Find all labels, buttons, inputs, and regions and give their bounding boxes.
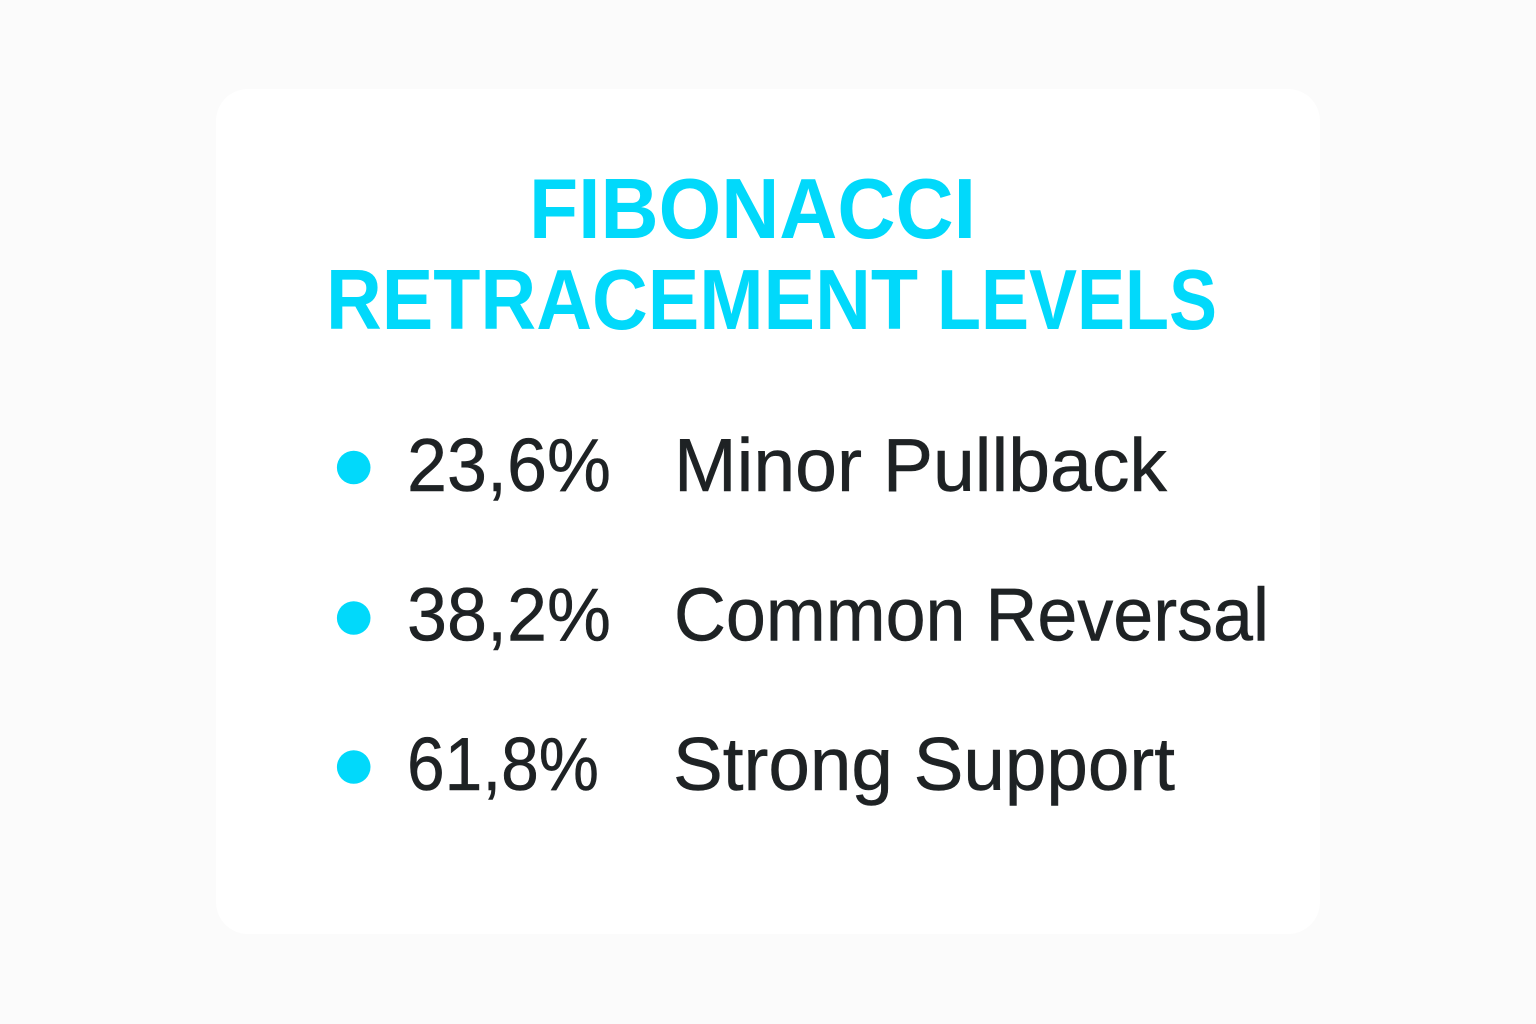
label: Strong Support: Strong Support (673, 722, 1175, 806)
percentage: 61,8%: 61,8% (407, 722, 599, 806)
icon: bullet dot (337, 750, 371, 784)
title: LEVELS (937, 253, 1217, 348)
title: RETRACEMENT (326, 253, 918, 348)
label: Common Reversal: Common Reversal (674, 572, 1269, 656)
panel: card (216, 89, 1320, 934)
level row: 61,8% Strong Support (337, 722, 1175, 806)
percentage: 23,6%: 23,6% (407, 423, 611, 507)
level row: 38,2% Common Reversal (337, 572, 1269, 656)
icon: bullet dot (337, 601, 371, 635)
title (326, 162, 1217, 348)
icon: bullet dot (337, 451, 371, 484)
title: FIBONACCI (529, 162, 976, 257)
percentage: 38,2%: 38,2% (407, 572, 611, 656)
label: Minor Pullback: Minor Pullback (674, 423, 1167, 507)
level row: 23,6% Minor Pullback (337, 423, 1167, 507)
